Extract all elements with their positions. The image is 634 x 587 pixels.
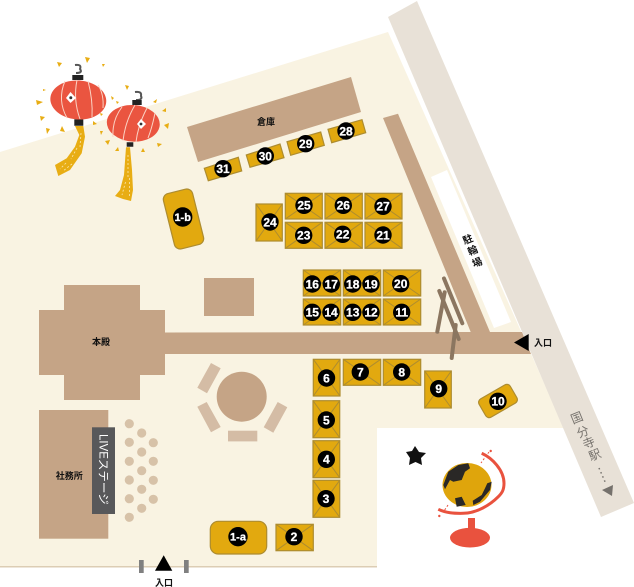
booth 26: 26 xyxy=(337,199,350,213)
bicycle parking xyxy=(431,170,511,328)
entrance east xyxy=(514,334,552,351)
booth 5: 5 xyxy=(323,413,330,427)
lantern right diamond xyxy=(137,119,146,129)
booth 27 xyxy=(365,193,402,219)
booth 25 xyxy=(285,193,322,219)
booth 1-b xyxy=(162,188,205,250)
booths 13 and 12: 12 xyxy=(364,306,378,320)
station label: 駅 xyxy=(587,446,603,464)
booth 30 xyxy=(246,144,284,167)
booth 28: 28 xyxy=(339,124,353,138)
booth 22: 22 xyxy=(336,228,350,242)
booth 1-b: 1-b xyxy=(174,212,191,224)
lantern right body xyxy=(106,103,161,143)
booths 15 and 14 xyxy=(303,299,341,325)
booth 10: 10 xyxy=(491,395,505,409)
main hall: 本殿 xyxy=(92,336,110,347)
booth 4: 4 xyxy=(323,453,330,467)
booth 5 xyxy=(313,401,340,438)
warehouse: 倉庫 xyxy=(257,116,275,127)
bicycle parking label: 場 xyxy=(471,256,484,270)
booth 2: 2 xyxy=(291,530,298,544)
booth 6: 6 xyxy=(323,371,330,385)
lantern left tassel xyxy=(55,126,85,176)
booth 20: 20 xyxy=(394,277,408,291)
lantern right hook xyxy=(135,92,141,100)
booth 3: 3 xyxy=(323,492,330,506)
globe sphere xyxy=(442,463,492,507)
booth 21: 21 xyxy=(376,228,390,242)
booth 8: 8 xyxy=(398,365,405,379)
lantern right stripes xyxy=(113,105,155,142)
live stage: LIVEステージ xyxy=(96,434,108,505)
road to Kokubunji station xyxy=(388,1,634,517)
booth 26 xyxy=(325,193,362,219)
live stage xyxy=(92,427,115,514)
lantern right tassel xyxy=(115,147,133,201)
booths 18 and 19: 19 xyxy=(364,277,378,291)
booths 18 and 19 xyxy=(343,270,381,296)
entrance east: 入口 xyxy=(534,338,552,348)
booths 16 and 17: 16 xyxy=(306,277,319,291)
booths 15 and 14: 14 xyxy=(324,306,338,320)
booth 31 xyxy=(204,157,242,181)
ground bottom edge xyxy=(0,566,377,568)
lantern left hook xyxy=(75,65,81,73)
booths 28-31 xyxy=(204,120,366,181)
station label: 分 xyxy=(575,423,591,441)
bicycle parking label: 駐 xyxy=(461,232,475,247)
booth 29: 29 xyxy=(299,137,313,151)
booth 29 xyxy=(287,132,324,155)
booth 11 xyxy=(383,299,421,325)
station label: 国 xyxy=(569,409,585,427)
star xyxy=(406,446,426,465)
booth 6 xyxy=(313,359,340,396)
globe arc and axis xyxy=(438,453,504,513)
booth 11: 11 xyxy=(395,306,408,320)
booth 24: 24 xyxy=(263,215,277,229)
booth 21 xyxy=(365,222,402,248)
booths 13 and 12 xyxy=(343,299,381,325)
booth 2 xyxy=(276,524,313,551)
booth 24 xyxy=(256,204,282,241)
lantern left stripes xyxy=(61,80,103,119)
booth 7: 7 xyxy=(357,365,364,379)
booths 15 and 14: 15 xyxy=(306,306,319,320)
booth 1-a: 1-a xyxy=(230,532,247,544)
booth 27: 27 xyxy=(376,200,390,214)
booths 18 and 19: 18 xyxy=(346,277,360,291)
audience seats xyxy=(125,419,158,522)
south entrance xyxy=(139,555,189,587)
booth 25: 25 xyxy=(297,199,311,213)
booth 10 xyxy=(477,383,519,419)
globe continents xyxy=(443,463,492,507)
booths 16 and 17 xyxy=(303,270,341,296)
lantern left body xyxy=(49,79,108,121)
round plaza with benches xyxy=(197,363,287,441)
lantern left caps xyxy=(72,75,83,126)
trees xyxy=(437,278,462,358)
bicycle parking label: 輪 xyxy=(466,243,480,258)
booth 7 xyxy=(343,359,381,385)
booth 30: 30 xyxy=(259,149,272,163)
bicycle parking label xyxy=(461,232,484,270)
globe stand xyxy=(468,518,475,532)
booth 9 xyxy=(425,371,451,408)
booth 3 xyxy=(313,480,340,517)
booth 31: 31 xyxy=(216,162,230,176)
booth 20 xyxy=(383,270,421,296)
lantern right caps xyxy=(127,100,142,147)
lantern sparkles xyxy=(36,57,169,152)
warehouse xyxy=(187,77,361,162)
booth 4 xyxy=(313,441,340,478)
booth 1-a xyxy=(210,521,267,554)
booth 9: 9 xyxy=(435,382,442,396)
station label xyxy=(569,409,613,496)
office: 社務所 xyxy=(56,470,83,481)
lantern left diamond xyxy=(66,92,76,103)
booths 16 and 17: 17 xyxy=(325,277,338,291)
booth 23 xyxy=(285,222,322,248)
booth 8 xyxy=(383,359,421,385)
booth 22 xyxy=(325,222,362,248)
main hall xyxy=(39,285,165,400)
office xyxy=(39,410,108,539)
globe xyxy=(438,450,504,548)
lantern left xyxy=(49,65,108,176)
small building xyxy=(204,278,254,316)
booth 28 xyxy=(328,120,366,143)
paths xyxy=(165,114,531,354)
booth 23: 23 xyxy=(297,229,311,243)
booths 13 and 12: 13 xyxy=(346,306,360,320)
lantern right xyxy=(106,92,161,201)
station label: 寺 xyxy=(581,434,597,452)
